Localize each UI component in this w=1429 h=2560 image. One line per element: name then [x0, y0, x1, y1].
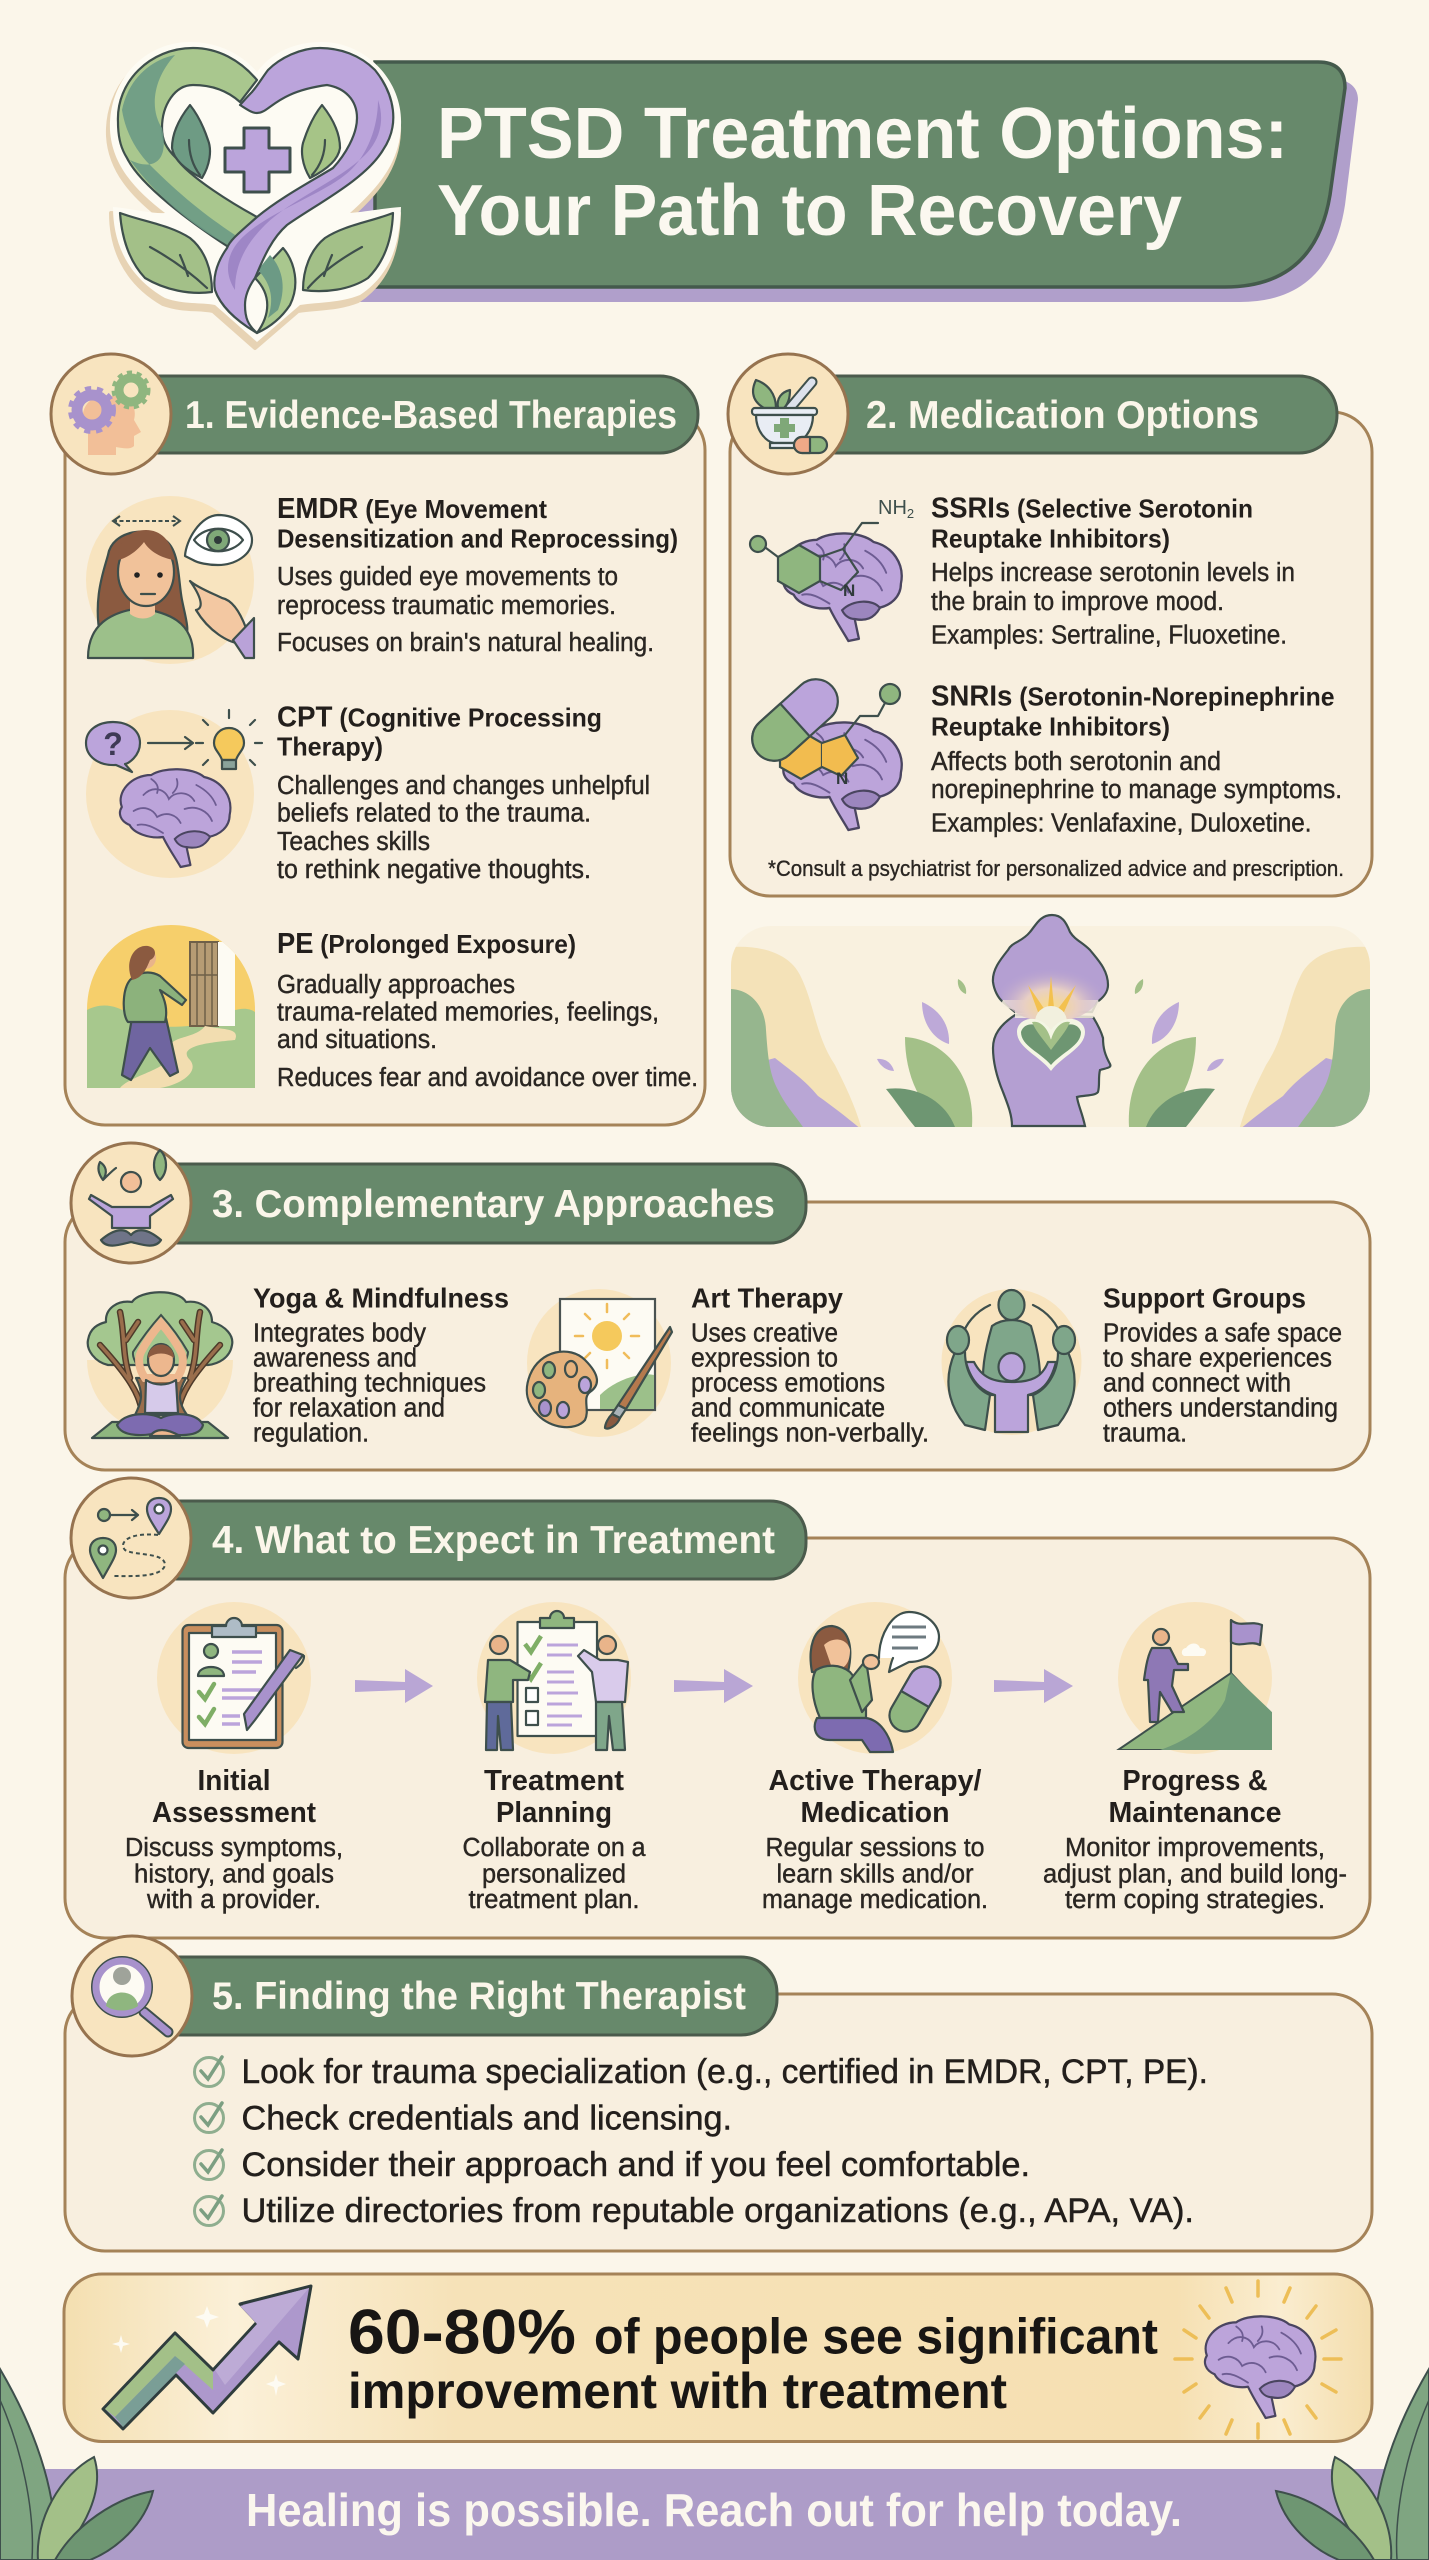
icon: guided eye movements	[86, 496, 254, 664]
text: CPT: Challenges and changes unhelpful	[277, 772, 650, 800]
purple ribbon	[214, 48, 393, 333]
text: support groups: and connect with	[1103, 1370, 1291, 1398]
icon: mortar and pestle	[728, 354, 848, 474]
text: treatment planning: treatment plan.	[468, 1886, 640, 1914]
text: art therapy: feelings non-verbally.	[691, 1420, 929, 1448]
head silhouette	[993, 915, 1110, 1126]
decorative leaves: bottom right	[1276, 2369, 1429, 2560]
text: art therapy: Uses creative	[691, 1320, 838, 1348]
item: EMDR	[86, 493, 678, 664]
text: PE: Gradually approaches	[277, 971, 515, 999]
text: SNRIs: Affects both serotonin and	[931, 748, 1221, 776]
text: progress and maintenance: Maintenance	[1108, 1797, 1282, 1829]
item: SSRIs	[750, 492, 1295, 650]
text: PE: PE (Prolonged Exposure)	[277, 928, 576, 960]
icon: serotonin molecule on brain: 2	[907, 506, 914, 521]
text: SNRIs	[931, 680, 1342, 838]
text: CPT: CPT (Cognitive Processing	[277, 702, 602, 734]
arrow: step 3 to 4	[994, 1669, 1073, 1703]
check item 1: Look for trauma specialization (e.g., certified in EMDR, CPT, PE).	[242, 2053, 1208, 2091]
text: yoga and mindfulness: for relaxation and	[253, 1394, 445, 1422]
arrow: step 1 to 2	[355, 1669, 433, 1703]
text: progress and maintenance: adjust plan, and build long-	[1043, 1860, 1347, 1888]
icon: capsule and molecule on brain	[743, 670, 902, 830]
text: yoga and mindfulness	[253, 1282, 509, 1448]
text: initial assessment: Assessment	[152, 1797, 316, 1829]
text: EMDR: EMDR (Eye Movement	[277, 493, 547, 525]
item: yoga and mindfulness	[87, 1282, 509, 1448]
footer banner	[0, 2469, 1429, 2560]
text: treatment planning: Planning	[496, 1797, 612, 1829]
icon: clipboard and pen	[157, 1602, 311, 1754]
text: EMDR	[277, 493, 678, 657]
text: SSRIs	[931, 492, 1295, 650]
text: initial assessment: Initial	[198, 1765, 270, 1797]
title text: PTSD Treatment Options:	[437, 94, 1288, 174]
icon: person taking medication	[798, 1602, 952, 1754]
text: SSRIs: the brain to improve mood.	[931, 588, 1224, 616]
text: SNRIs: SNRIs (Serotonin-Norepinephrine	[931, 680, 1334, 712]
text: support groups	[1103, 1282, 1342, 1448]
text: support groups: to share experiences	[1103, 1344, 1332, 1372]
text: art therapy	[691, 1282, 929, 1448]
icon: two people at a checklist	[477, 1602, 631, 1754]
icon: climbing a mountain to a flag	[1118, 1602, 1275, 1754]
item: art therapy	[527, 1282, 929, 1448]
text: SSRIs: Helps increase serotonin levels in	[931, 559, 1295, 587]
item: PE	[87, 925, 698, 1092]
text: CPT: beliefs related to the trauma.	[277, 800, 591, 828]
arrow: step 2 to 3	[674, 1669, 753, 1703]
step: active therapy / medication	[762, 1602, 988, 1914]
text: statistic: improvement with treatment	[348, 2363, 1007, 2419]
text: yoga and mindfulness: Integrates body	[253, 1320, 426, 1348]
text: PE: Reduces fear and avoidance over time.	[277, 1064, 698, 1092]
item: SNRIs	[743, 670, 1342, 838]
icon: yoga under a tree	[87, 1292, 233, 1438]
icon: capsule and molecule on brain: N	[836, 769, 848, 788]
text: art therapy: expression to	[691, 1344, 838, 1372]
text: active therapy / medication: manage medication.	[762, 1886, 988, 1914]
text: progress and maintenance: Monitor improvements,	[1065, 1834, 1325, 1862]
text: yoga and mindfulness: breathing techniques	[253, 1370, 486, 1398]
right big leaf	[303, 213, 393, 291]
cross	[225, 128, 290, 192]
text: statistic: 60-80%	[348, 2298, 576, 2368]
checklist	[194, 2053, 1208, 2230]
text: initial assessment: with a provider.	[146, 1886, 321, 1914]
text: art therapy: and communicate	[691, 1394, 885, 1422]
text: SNRIs: Reuptake Inhibitors)	[931, 712, 1170, 742]
inner leaves	[172, 105, 340, 178]
icon: serotonin molecule on brain	[750, 497, 914, 641]
text: PE: trauma-related memories, feelings,	[277, 998, 659, 1026]
icon: meditating figure	[71, 1143, 191, 1263]
footer banner: Healing is possible. Reach out for help today.	[246, 2484, 1182, 2536]
text: yoga and mindfulness: awareness and	[253, 1344, 417, 1372]
text: treatment planning	[462, 1765, 646, 1914]
title text: Your Path to Recovery	[437, 171, 1182, 251]
text: progress and maintenance: term coping strategies.	[1065, 1886, 1325, 1914]
icon: route with map pins	[71, 1478, 191, 1598]
text: statistic: of people see significant	[594, 2308, 1158, 2364]
heading: evidence-based therapies: 1. Evidence-Based Therapies	[185, 394, 677, 437]
text: support groups: Support Groups	[1103, 1282, 1306, 1314]
text: SSRIs: Examples: Sertraline, Fluoxetine.	[931, 622, 1287, 650]
text: CPT: Therapy)	[277, 732, 383, 762]
text: progress and maintenance	[1043, 1765, 1347, 1914]
text: yoga and mindfulness: regulation.	[253, 1420, 369, 1448]
icon: glowing brain	[1175, 2281, 1341, 2438]
text: CPT: to rethink negative thoughts.	[277, 856, 591, 884]
text: active therapy / medication: Medication	[800, 1797, 950, 1829]
text: treatment planning: personalized	[482, 1860, 626, 1888]
text: support groups: trauma.	[1103, 1420, 1187, 1448]
text: SSRIs: Reuptake Inhibitors)	[931, 524, 1170, 554]
text: CPT: Teaches skills	[277, 828, 430, 856]
step: progress and maintenance	[1043, 1602, 1347, 1914]
step: treatment planning	[462, 1602, 646, 1914]
panel: evidence-based therapies	[51, 354, 705, 1125]
icon: serotonin molecule on brain: NH	[878, 497, 907, 519]
heading: what to expect in treatment	[131, 1501, 806, 1579]
text: initial assessment	[125, 1765, 343, 1914]
panel: finding the right therapist	[65, 1936, 1372, 2251]
text: PE	[277, 928, 698, 1092]
panel: medication options	[728, 354, 1372, 896]
check item 3: Consider their approach and if you feel comfortable.	[242, 2146, 1030, 2184]
text: SNRIs: norepinephrine to manage symptoms.	[931, 776, 1342, 804]
statistic callout	[64, 2274, 1372, 2442]
heading: finding the right therapist	[132, 1957, 777, 2035]
heading: finding the right therapist: 5. Finding the Right Therapist	[212, 1975, 746, 2018]
icon: question, idea and brain: ?	[103, 726, 123, 762]
left big leaf	[120, 213, 212, 293]
icon: question, idea and brain	[86, 710, 262, 878]
text: EMDR: Uses guided eye movements to	[277, 563, 618, 591]
text: EMDR: reprocess traumatic memories.	[277, 592, 616, 620]
icon: canvas, palette and brush	[527, 1289, 672, 1437]
text: SNRIs: Examples: Venlafaxine, Duloxetine.	[931, 810, 1312, 838]
check item 2: Check credentials and licensing.	[242, 2100, 732, 2138]
illustration: healing head with heart and leaves	[731, 915, 1370, 1130]
text: CPT	[277, 702, 650, 884]
decorative leaves: bottom left	[0, 2369, 153, 2560]
text: art therapy: Art Therapy	[691, 1282, 843, 1314]
icon: heart ribbon logo	[108, 42, 401, 348]
text: EMDR: Desensitization and Reprocessing)	[277, 524, 678, 554]
text: progress and maintenance: Progress &	[1122, 1765, 1268, 1797]
footnote: *Consult a psychiatrist for personalized advice and prescription.	[768, 856, 1344, 881]
text: active therapy / medication: Active Therapy/	[768, 1765, 982, 1797]
text: support groups: Provides a safe space	[1103, 1320, 1342, 1348]
panel: complementary approaches	[65, 1143, 1370, 1470]
check item 4: Utilize directories from reputable organizations (e.g., APA, VA).	[242, 2192, 1194, 2230]
title text	[437, 94, 1288, 251]
panel: what to expect in treatment	[65, 1478, 1370, 1938]
heading: complementary approaches	[131, 1164, 806, 1243]
heading: medication options: 2. Medication Options	[866, 394, 1259, 437]
text: treatment planning: Treatment	[484, 1765, 624, 1797]
text: initial assessment: Discuss symptoms,	[125, 1834, 343, 1862]
text: PE: and situations.	[277, 1026, 437, 1054]
icon: serotonin molecule on brain: N	[843, 581, 855, 600]
icon: head with gears	[51, 354, 171, 474]
icon: circle of people	[942, 1289, 1082, 1435]
heading: medication options	[788, 376, 1337, 453]
text: treatment planning: Collaborate on a	[462, 1834, 646, 1862]
text: active therapy / medication: Regular sessions to	[766, 1834, 984, 1862]
text: art therapy: process emotions	[691, 1370, 885, 1398]
text: EMDR: Focuses on brain's natural healing.	[277, 629, 654, 657]
text: active therapy / medication	[762, 1765, 988, 1914]
text: support groups: others understanding	[1103, 1394, 1338, 1422]
item: CPT	[86, 702, 650, 884]
text: SSRIs: SSRIs (Selective Serotonin	[931, 492, 1253, 524]
green ribbon	[118, 48, 295, 333]
title banner	[351, 62, 1358, 302]
item: support groups	[942, 1282, 1342, 1448]
icon: magnifying glass over person	[72, 1936, 192, 2056]
text: active therapy / medication: learn skills and/or	[776, 1860, 974, 1888]
icon: rising zigzag arrow	[103, 2286, 311, 2429]
text: statistic	[348, 2298, 1158, 2419]
icon: walking through a gate	[87, 925, 255, 1088]
heading: evidence-based therapies	[112, 376, 698, 453]
text: initial assessment: history, and goals	[134, 1860, 334, 1888]
heading: what to expect in treatment: 4. What to Expect in Treatment	[212, 1519, 775, 1562]
heading: complementary approaches: 3. Complementary Approaches	[212, 1183, 775, 1226]
step: initial assessment	[125, 1602, 343, 1914]
text: yoga and mindfulness: Yoga & Mindfulness	[253, 1282, 509, 1314]
